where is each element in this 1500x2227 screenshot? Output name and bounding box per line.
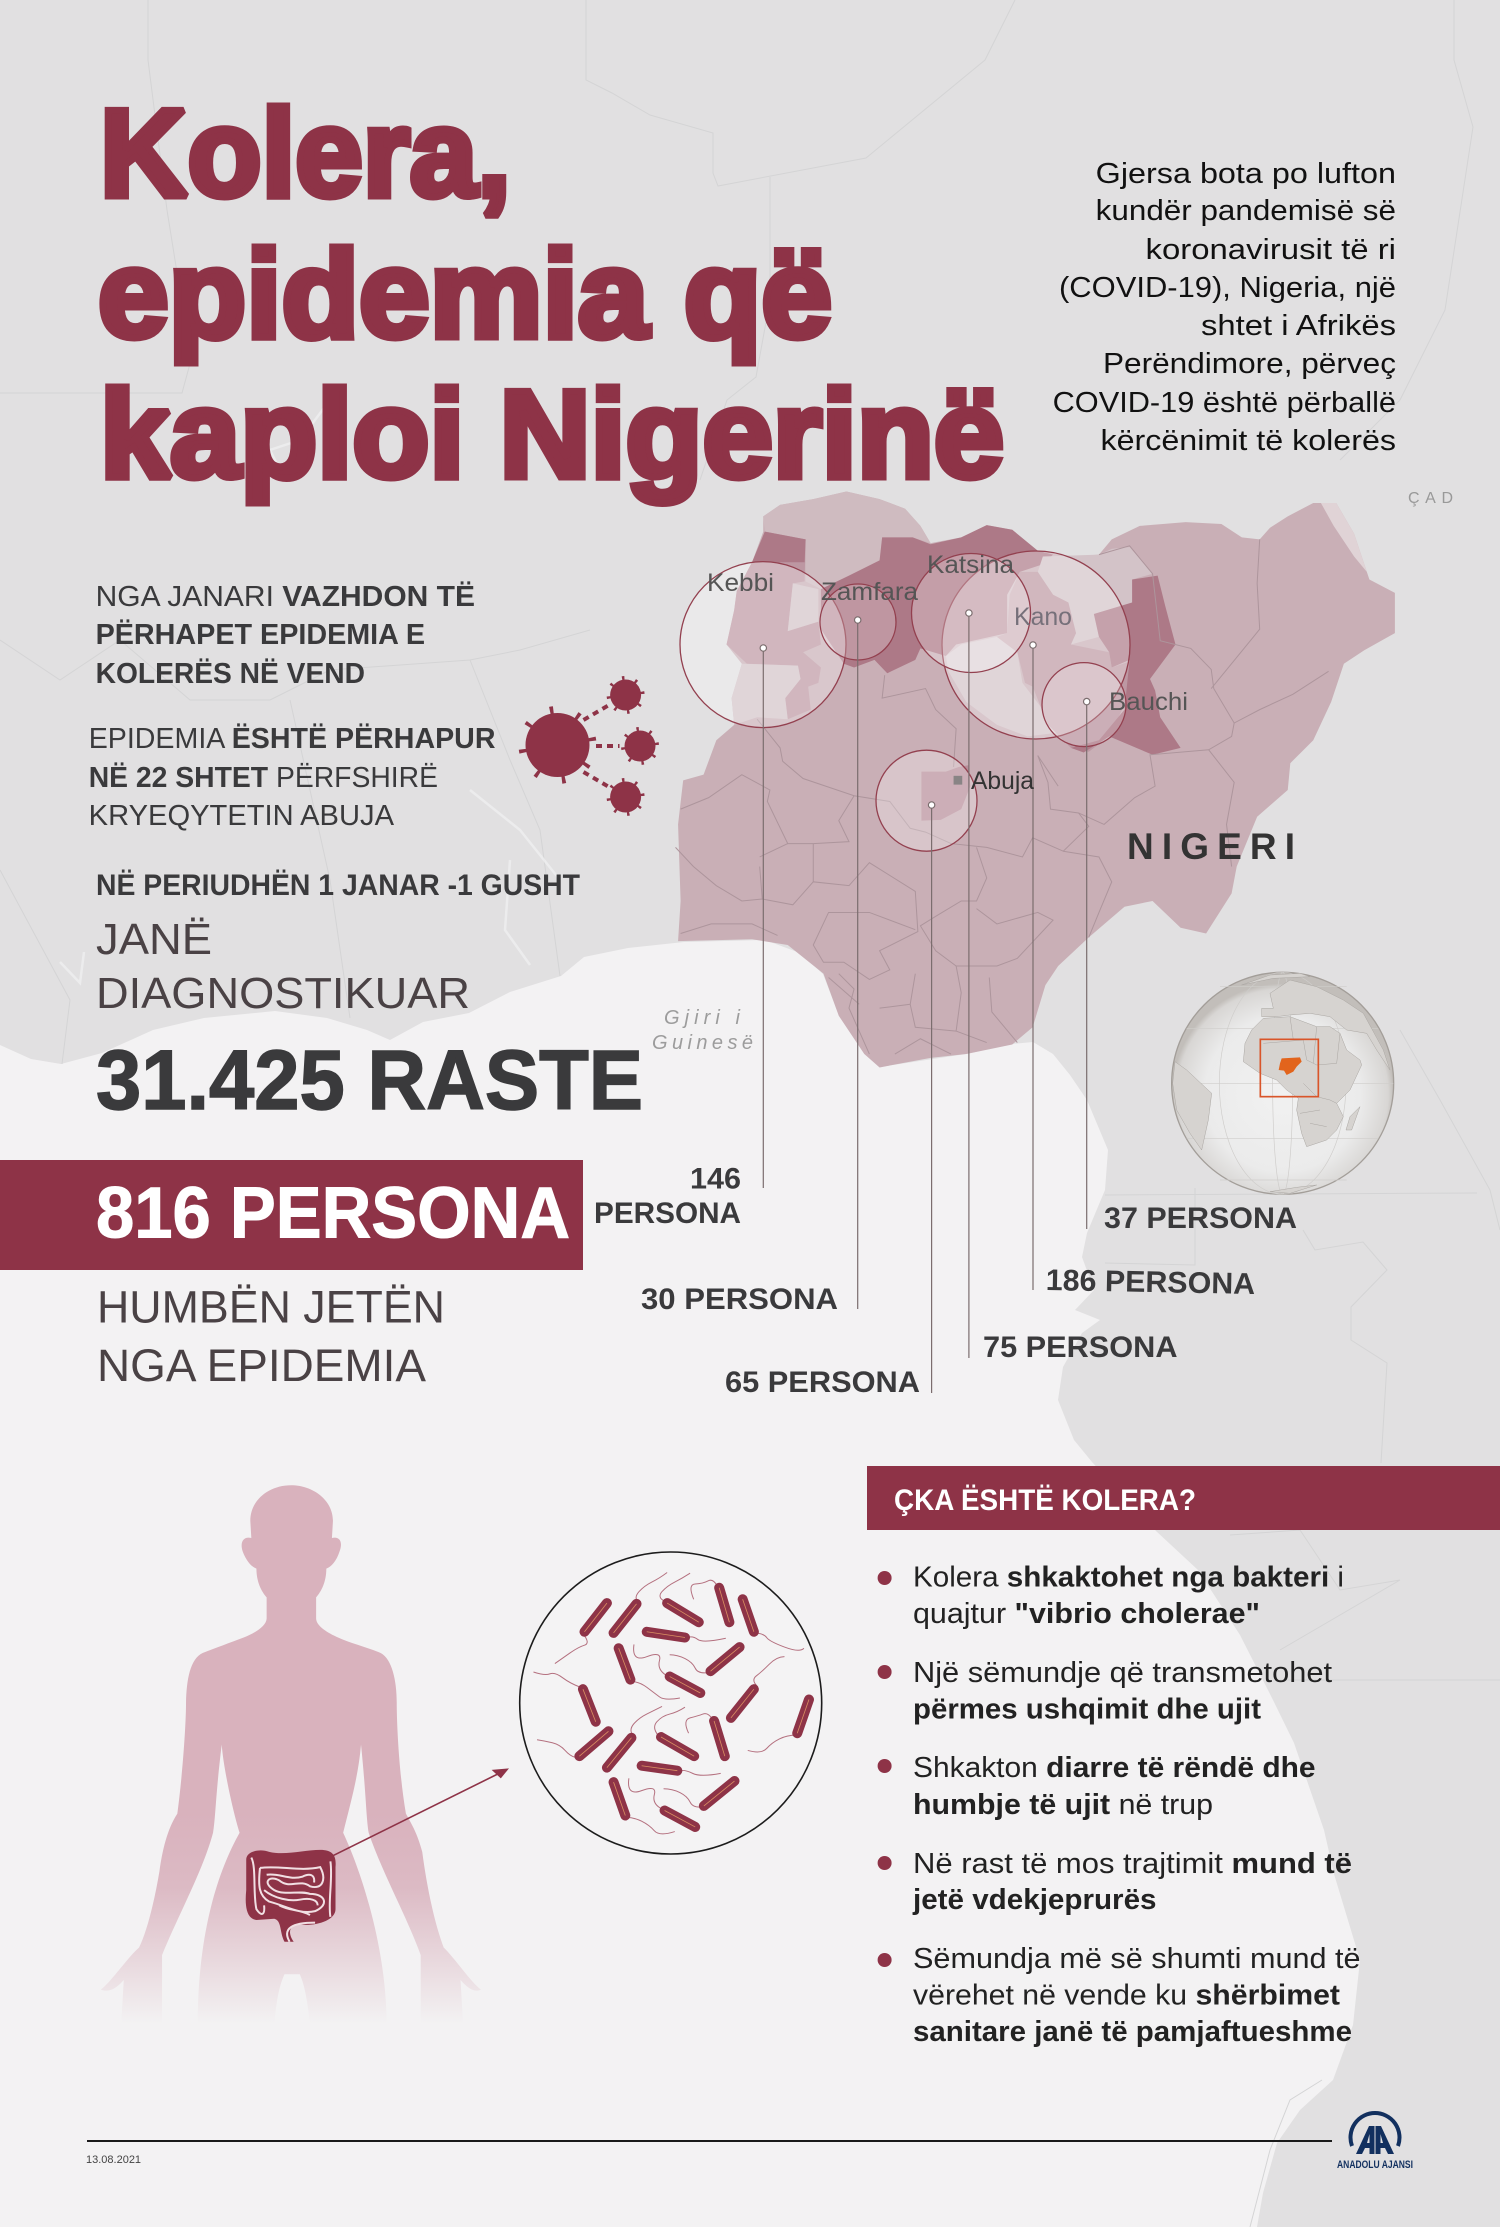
circle: Bauchi <box>1042 663 1126 747</box>
footer rule <box>87 2140 1332 2142</box>
big number: cases: 31.425 RASTE <box>96 1033 643 1127</box>
label: Kebbi: Kebbi <box>707 569 774 597</box>
banner: deaths: 816 PERSONA <box>96 1174 570 1254</box>
map: Nigeria <box>676 491 1395 1067</box>
label: Katsina: Katsina <box>927 551 1014 579</box>
circle: Kebbi <box>680 562 846 728</box>
count: Kano: 186 PERSONA <box>1045 1264 1255 1301</box>
title: Kolera, <box>100 85 511 223</box>
bullet 5: vërehet në vende ku shërbimet <box>913 1980 1340 2012</box>
Abuja federal territory <box>921 765 970 821</box>
globe graticule <box>1173 972 1393 1194</box>
intro paragraph: (COVID-19), Nigeria, një <box>1059 272 1396 304</box>
bullet 3 <box>878 1752 1316 1821</box>
text: period: NË PERIUDHËN 1 JANAR -1 GUSHT <box>96 869 580 902</box>
text: epidemic continues: PËRHAPET EPIDEMIA E <box>96 618 425 651</box>
count: Abuja: 65 PERSONA <box>725 1366 920 1399</box>
intro paragraph <box>1053 158 1396 457</box>
bullet 5: sanitare janë të pamjaftueshme <box>913 2016 1352 2048</box>
body silhouette <box>101 1485 481 2024</box>
label: Chad: ÇAD <box>1408 490 1453 507</box>
intro paragraph: koronavirusit të ri <box>1146 234 1396 266</box>
globe locator <box>1172 972 1394 1194</box>
text: epidemic continues: NGA JANARI VAZHDON TË <box>96 580 475 613</box>
title: kaploi Nigerinë <box>100 366 1004 504</box>
globe sphere <box>1172 972 1394 1194</box>
count: Kebbi: 146 <box>690 1162 741 1196</box>
circle: Kano <box>942 551 1130 739</box>
Kano region <box>997 572 1135 752</box>
count: Kebbi <box>594 1162 741 1230</box>
bullet 4 <box>878 1848 1352 1916</box>
text: epidemic continues: KOLERËS NË VEND <box>96 657 365 690</box>
count: Zamfara: 30 PERSONA <box>641 1283 838 1316</box>
text: diagnosed: JANË <box>96 915 212 964</box>
state borders <box>676 539 1329 1054</box>
title <box>98 85 1004 504</box>
logo: Anadolu Ajansi: ANADOLU AJANSI <box>1337 2159 1413 2171</box>
bullet 4: jetë vdekjeprurës <box>912 1884 1156 1916</box>
bacteria bodies <box>579 1588 809 1827</box>
label: Gulf of Guinea: Gjiri i <box>664 1007 741 1029</box>
bacteria flagella <box>533 1572 804 1834</box>
bullet 2: përmes ushqimit dhe ujit <box>913 1694 1261 1726</box>
pale state patches <box>732 664 801 725</box>
Zamfara and Katsina dark region <box>821 525 1053 673</box>
bullet 5: Sëmundja më së shumti mund të <box>913 1943 1361 1975</box>
intro paragraph: kundër pandemisë së <box>1096 195 1396 227</box>
intro paragraph: shtet i Afrikës <box>1201 310 1396 342</box>
text: epidemic continues <box>96 580 475 690</box>
bullet 3: Shkakton diarre të rëndë dhe <box>913 1752 1316 1784</box>
text: lost their lives: NGA EPIDEMIA <box>97 1340 426 1391</box>
logo: Anadolu Ajansi <box>1337 2113 1413 2171</box>
count: Katsina: 75 PERSONA <box>983 1331 1178 1364</box>
bullet 1 <box>878 1562 1344 1630</box>
magnifier outline <box>520 1552 822 1854</box>
bullet 2 <box>878 1657 1332 1726</box>
state labels <box>707 551 1188 795</box>
text: 22 states <box>89 722 496 832</box>
intro paragraph: Perëndimore, përveç <box>1103 348 1396 380</box>
globe: locator box <box>1260 1039 1318 1097</box>
text: diagnosed: DIAGNOSTIKUAR <box>96 969 470 1018</box>
label: country Nigeria: NIGERI <box>1127 826 1295 867</box>
count: Bauchi: 37 PERSONA <box>1104 1202 1297 1235</box>
leader lines with dots <box>760 610 1090 1393</box>
text: diagnosed <box>96 915 470 1018</box>
label: Bauchi: Bauchi <box>1109 688 1188 716</box>
globe: Nigeria highlight <box>1279 1057 1302 1075</box>
label: Abuja: Abuja <box>971 767 1034 795</box>
Kebbi state <box>727 532 821 719</box>
bullet 4: Në rast të mos trajtimit mund të <box>913 1848 1352 1880</box>
bullet 5 <box>878 1943 1361 2048</box>
title: epidemia që <box>98 226 832 364</box>
intro paragraph: Gjersa bota po lufton <box>1096 158 1396 190</box>
bullet 1: Kolera shkaktohet nga bakteri i <box>913 1562 1344 1594</box>
bullet 2: Një sëmundje që transmetohet <box>913 1657 1332 1689</box>
text: lost their lives <box>97 1282 445 1391</box>
bullet 3: humbje të ujit në trup <box>913 1789 1213 1821</box>
intestines <box>246 1850 336 1942</box>
date: 13.08.2021 <box>86 2154 141 2166</box>
globe continents <box>1173 973 1390 1193</box>
count: Kebbi: PERSONA <box>594 1197 741 1230</box>
Bauchi and Gombe dark region <box>1071 576 1181 755</box>
panel heading <box>867 1466 1500 1530</box>
label: Zamfara: Zamfara <box>821 578 918 606</box>
arrow to microscope view <box>333 1768 509 1856</box>
map circles <box>680 551 1130 851</box>
text: 22 states: NË 22 SHTET PËRFSHIRË <box>89 761 438 794</box>
banner: deaths <box>0 1160 583 1270</box>
panel heading: ÇKA ËSHTË KOLERA? <box>894 1484 1196 1517</box>
intro paragraph: kërcënimit të kolerës <box>1100 425 1396 457</box>
microscope circle with bacteria <box>520 1552 822 1854</box>
label: Kano: Kano <box>1014 603 1072 631</box>
label: Gulf of Guinea <box>652 1007 753 1054</box>
death counts per state <box>594 1162 1297 1399</box>
circle: Abuja <box>876 750 977 851</box>
intro paragraph: COVID-19 është përballë <box>1053 387 1396 419</box>
panel: what is cholera <box>867 1466 1500 2048</box>
circle: Katsina <box>912 554 1030 672</box>
text: 22 states: KRYEQYTETIN ABUJA <box>89 800 395 832</box>
human body illustration <box>101 1485 509 2024</box>
Nigeria country shape <box>678 491 1395 1067</box>
icon: spreading virus <box>522 678 657 814</box>
Sokoto lighter region <box>763 491 931 589</box>
Abuja marker <box>954 776 962 785</box>
label: Gulf of Guinea: Guinesë <box>652 1032 753 1054</box>
north-east pale sliver <box>1321 503 1367 572</box>
text: 22 states: EPIDEMIA ËSHTË PËRHAPUR <box>89 722 496 755</box>
bullet 1: quajtur "vibrio cholerae" <box>913 1598 1260 1630</box>
circle: Zamfara <box>820 584 896 660</box>
text: lost their lives: HUMBËN JETËN <box>97 1282 445 1332</box>
